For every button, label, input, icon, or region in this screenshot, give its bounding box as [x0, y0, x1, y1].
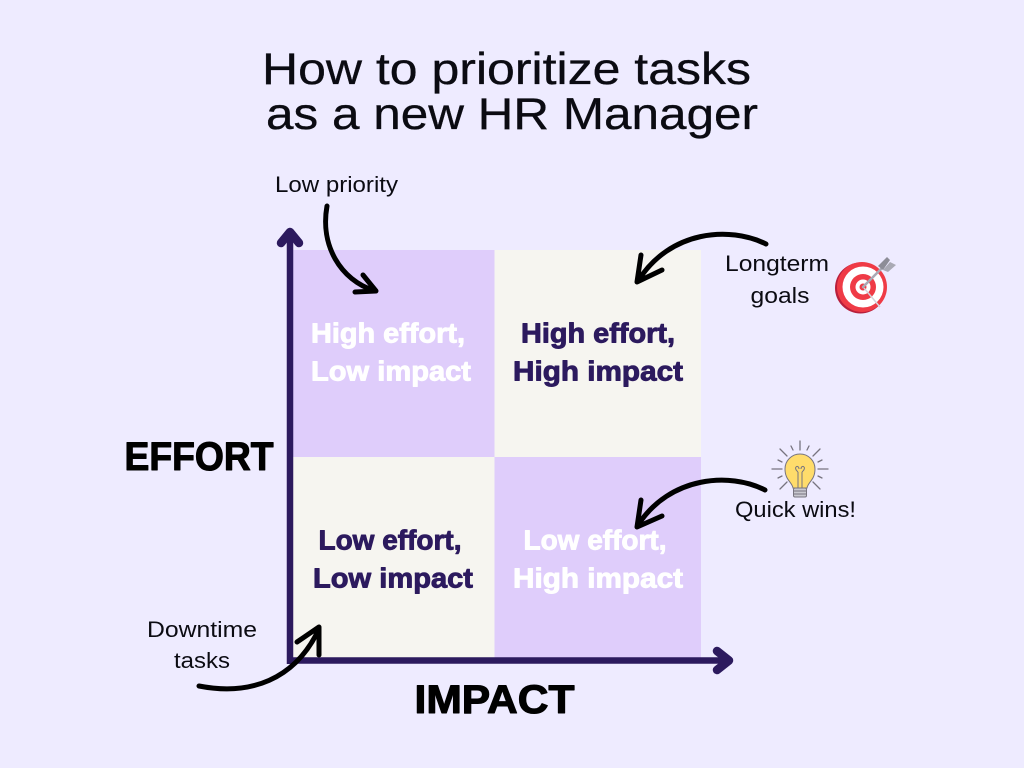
panel: high effort, high impact: High effort, [521, 318, 675, 348]
label: downtime tasks: tasks [174, 648, 230, 673]
arrow: longterm goals [637, 234, 766, 282]
label: downtime tasks [147, 617, 257, 673]
panel: low effort, low impact [290, 457, 494, 660]
label: longterm goals: Longterm [725, 251, 829, 276]
panel: low effort, low impact: Low effort, [318, 524, 462, 556]
axis label: effort: EFFORT [124, 435, 274, 479]
panel: high effort, low impact [290, 250, 494, 457]
label: longterm goals [725, 251, 829, 308]
arrow: downtime tasks [199, 627, 319, 689]
panel: high effort, low impact: High effort, [311, 318, 465, 348]
vertical axis arrow [281, 232, 299, 664]
label: longterm goals: goals [750, 283, 810, 308]
icon: light bulb [772, 441, 828, 497]
label: low priority: Low priority [275, 172, 398, 197]
label: downtime tasks: Downtime [147, 617, 257, 642]
title: as a new HR Manager [266, 90, 758, 139]
arrow: quick wins [637, 480, 765, 527]
panel: high effort, high impact [494, 250, 701, 457]
panel: high effort, high impact: High impact [513, 356, 683, 386]
title: How to prioritize tasks [262, 45, 751, 94]
panel: low effort, high impact: High impact [513, 562, 683, 594]
arrow: low priority [326, 206, 376, 292]
panel: low effort, low impact: Low impact [313, 562, 473, 594]
panel: low effort, high impact [494, 457, 701, 660]
panel: low effort, high impact: Low effort, [524, 524, 666, 556]
label: quick wins: Quick wins! [735, 497, 856, 522]
panel: high effort, low impact: Low impact [311, 356, 471, 386]
title [262, 45, 758, 139]
axis label: impact: IMPACT [414, 678, 574, 722]
icon: target with arrow [835, 257, 896, 314]
horizontal axis arrow [287, 651, 729, 670]
